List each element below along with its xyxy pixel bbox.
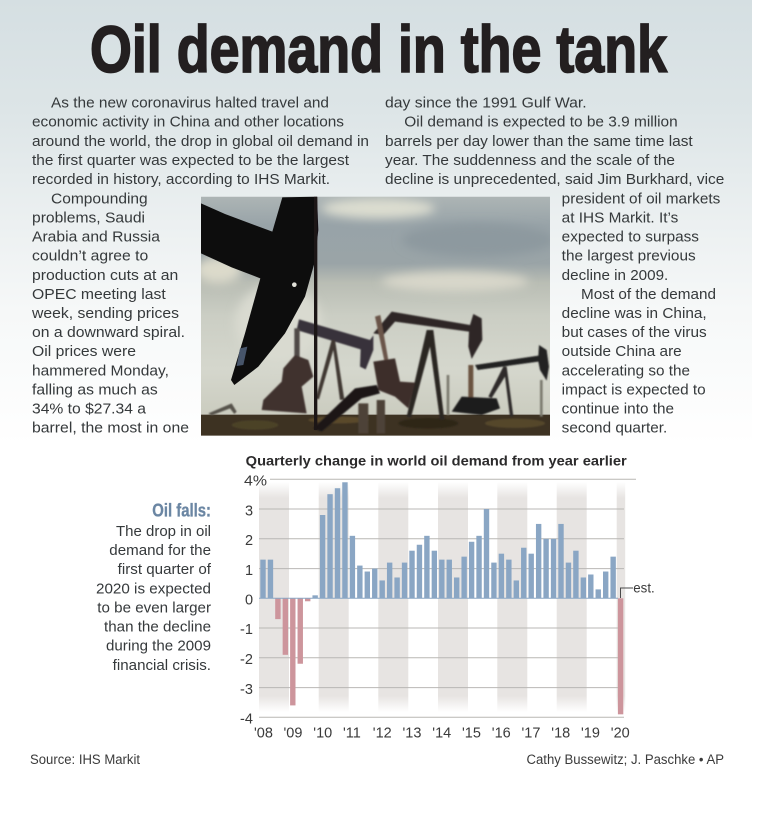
x axis labels: '11 — [343, 726, 361, 742]
article text: top right column: year. The suddenness and the scale of the — [385, 152, 675, 169]
article text: narrow right column: decline was in China, — [562, 305, 707, 322]
article text: narrow left column: Oil prices were — [32, 343, 136, 360]
x axis labels: '13 — [402, 726, 421, 742]
article text: narrow right column: decline in 2009. — [562, 267, 668, 284]
x axis labels: '16 — [492, 726, 511, 742]
article text: narrow left column: on a downward spiral. — [32, 324, 185, 341]
y axis labels: 3 — [245, 503, 253, 519]
sidebar text: to be even larger — [97, 599, 211, 616]
article text: narrow right column: but cases of the virus — [562, 324, 707, 341]
article text: narrow right column: expected to surpass — [562, 228, 699, 246]
y axis labels: -2 — [240, 652, 253, 668]
article text: narrow right column: the largest previous — [562, 248, 696, 265]
article text: narrow right column — [562, 190, 720, 437]
x axis labels: '19 — [581, 726, 600, 742]
y axis labels: 4% — [244, 474, 267, 490]
article text: narrow left column: Arabia and Russia — [32, 228, 161, 246]
positive bars — [260, 482, 616, 598]
sidebar text — [96, 523, 212, 674]
sidebar text: 2020 is expected — [96, 580, 211, 597]
article text: narrow right column: president of oil markets — [562, 190, 720, 207]
y axis labels — [240, 474, 267, 727]
sidebar text: during the 2009 — [106, 638, 211, 655]
y axis labels: 0 — [245, 592, 253, 608]
chart title: Quarterly change in world oil demand from year earlier — [246, 454, 628, 469]
negative bars — [275, 598, 623, 714]
sidebar text: first quarter of — [118, 561, 212, 578]
article text: narrow right column: at IHS Markit. It’s — [562, 209, 678, 226]
sidebar text: demand for the — [109, 542, 211, 559]
estimate callout: est. — [633, 580, 655, 595]
x axis labels: '20 — [611, 726, 630, 742]
background gradient panel — [0, 0, 752, 445]
distant pump jacks — [208, 312, 549, 433]
article text: top left column: As the new coronavirus halted travel and — [51, 94, 329, 111]
article text: top right column: decline is unprecedented, said Jim Burkhard, vice — [385, 171, 724, 188]
sidebar text: The drop in oil — [116, 523, 211, 540]
article text: top left column: around the world, the drop in global oil demand in — [32, 133, 369, 150]
article text: top right column: day since the 1991 Gulf War. — [385, 94, 587, 111]
article text: top left column: recorded in history, according to IHS Markit. — [32, 171, 330, 188]
photo: oil pump jacks silhouetted against the sky — [195, 197, 555, 436]
article text: narrow right column: second quarter. — [562, 420, 667, 437]
article text: narrow left column — [31, 190, 189, 437]
x axis labels: '18 — [551, 726, 570, 742]
article text: narrow right column: impact is expected to — [562, 382, 706, 398]
article text: narrow left column: OPEC meeting last — [32, 286, 167, 303]
article text: narrow left column: barrel, the most in one — [32, 420, 189, 437]
article text: top left column — [32, 94, 369, 188]
article text: narrow left column: 34% to $27.34 a — [32, 401, 147, 418]
credit line: Cathy Bussewitz; J. Paschke • AP — [526, 752, 724, 767]
article text: narrow left column: production cuts at an — [32, 267, 178, 284]
estimate callout — [620, 580, 655, 598]
foreground pump jack — [201, 197, 318, 430]
x axis labels: '12 — [373, 726, 392, 742]
x axis labels: '09 — [284, 726, 302, 742]
article text: narrow left column: couldn’t agree to — [32, 248, 148, 265]
article text: narrow left column: falling as much as — [32, 382, 158, 398]
source line: Source: IHS Markit — [30, 752, 140, 767]
article text: top right column: barrels per day lower than the same time last — [385, 133, 694, 150]
x axis labels: '08 — [254, 726, 273, 742]
x axis labels: '15 — [462, 726, 481, 742]
article text: top right column — [385, 94, 724, 188]
y axis labels: 1 — [245, 563, 253, 579]
y axis labels: 2 — [245, 533, 253, 549]
sidebar heading: Oil falls: — [152, 501, 211, 521]
ground — [201, 415, 550, 436]
sidebar text: than the decline — [104, 619, 211, 636]
ground vegetation — [232, 417, 545, 430]
x axis labels — [254, 726, 630, 742]
article text: narrow right column: Most of the demand — [581, 286, 716, 303]
article text: top left column: the first quarter was expected to be the largest — [32, 152, 350, 169]
y axis labels: -1 — [240, 622, 253, 638]
alternating year bands — [259, 482, 625, 712]
sidebar: Oil falls — [96, 501, 212, 674]
sidebar text: financial crisis. — [113, 657, 211, 674]
article text: top left column: economic activity in China and other locations — [32, 114, 344, 131]
article text: narrow left column: problems, Saudi — [32, 209, 145, 226]
article text: top right column: Oil demand is expected to be 3.9 million — [404, 114, 678, 131]
article text: narrow left column: Compounding — [51, 190, 148, 207]
article text: narrow right column: outside China are — [562, 343, 682, 360]
article text: narrow left column: week, sending prices — [31, 305, 179, 322]
zero baseline — [259, 597, 618, 599]
article text: narrow right column: accelerating so the — [562, 362, 690, 379]
y axis labels: -4 — [240, 711, 253, 727]
x axis labels: '10 — [313, 726, 332, 742]
bar chart: quarterly change in world oil demand — [240, 474, 655, 742]
x axis labels: '14 — [432, 726, 451, 742]
article text: narrow right column: continue into the — [562, 401, 674, 418]
x axis labels: '17 — [522, 726, 540, 742]
y axis labels: -3 — [240, 682, 253, 698]
article text: narrow left column: hammered Monday, — [32, 362, 169, 379]
grid lines — [259, 479, 636, 717]
